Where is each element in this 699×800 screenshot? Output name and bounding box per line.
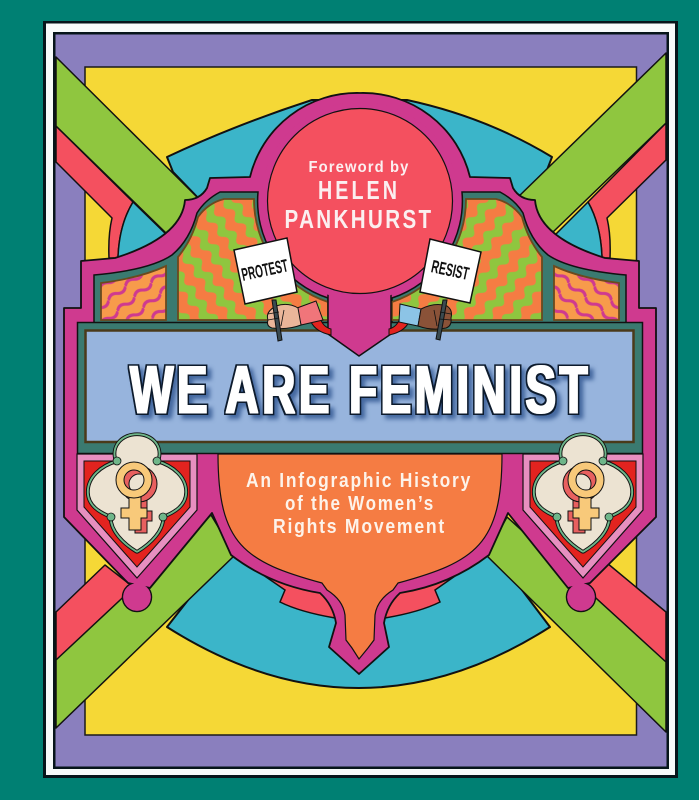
right hand holding resist sign xyxy=(389,300,452,340)
foreword text xyxy=(284,159,434,234)
foreword text: HELEN xyxy=(318,175,400,205)
yellow panel xyxy=(85,67,636,735)
resist sign xyxy=(420,239,481,303)
green band top left xyxy=(56,57,205,233)
venus symbol shadow xyxy=(121,466,157,533)
circle knobs fill xyxy=(123,583,595,611)
medallion left xyxy=(77,436,197,578)
red band bottom right xyxy=(570,563,666,675)
red circle xyxy=(268,108,452,294)
fist xyxy=(267,304,301,329)
blue side right xyxy=(550,202,602,258)
red band top right xyxy=(588,123,666,258)
magenta shield below circle xyxy=(328,285,391,356)
fist xyxy=(418,305,452,329)
protest sign xyxy=(234,238,297,304)
ornate panel right xyxy=(392,192,626,323)
green knobs xyxy=(107,457,167,521)
green band bottom right xyxy=(486,517,666,732)
subtitle: Rights Movement xyxy=(273,516,446,538)
panel frame xyxy=(94,192,328,323)
red shield xyxy=(84,461,190,567)
venus symbol xyxy=(120,466,148,530)
subtitle xyxy=(246,470,472,538)
blue side left xyxy=(118,202,172,258)
green band top right xyxy=(515,53,666,232)
protest sign: PROTEST xyxy=(240,255,290,285)
diagonal bands xyxy=(56,53,666,732)
foreword text: Foreword by xyxy=(308,159,410,176)
sleeve xyxy=(399,304,421,326)
red band top left xyxy=(56,126,133,258)
title banner xyxy=(78,322,642,454)
orange lower panel xyxy=(218,454,502,659)
resist sign: RESIST xyxy=(430,256,471,284)
subtitle: An Infographic History xyxy=(246,470,472,492)
quatrefoil xyxy=(89,436,185,550)
stick xyxy=(272,300,282,341)
zigzag panel xyxy=(178,199,328,320)
wave panel xyxy=(101,266,166,320)
stick xyxy=(436,300,447,340)
cuff xyxy=(389,318,409,335)
coral shape under orange xyxy=(231,553,488,618)
central magenta ornament xyxy=(64,93,656,674)
subtitle: of the Women’s xyxy=(285,493,435,515)
circle knobs outlines xyxy=(122,582,596,612)
green band bottom left xyxy=(56,515,235,728)
blue shape upper xyxy=(167,100,552,200)
cuff xyxy=(311,318,331,335)
magenta ring lower xyxy=(261,102,459,300)
left hand holding protest sign xyxy=(267,300,331,341)
blue shape lower xyxy=(167,545,550,688)
shield frame xyxy=(77,454,197,578)
sleeve xyxy=(297,301,323,325)
fingers xyxy=(268,310,284,326)
medallion right xyxy=(523,436,643,578)
ornate panel left xyxy=(94,192,328,323)
fingers xyxy=(434,310,451,326)
red band bottom left xyxy=(56,565,150,675)
foreword text: PANKHURST xyxy=(284,204,434,234)
